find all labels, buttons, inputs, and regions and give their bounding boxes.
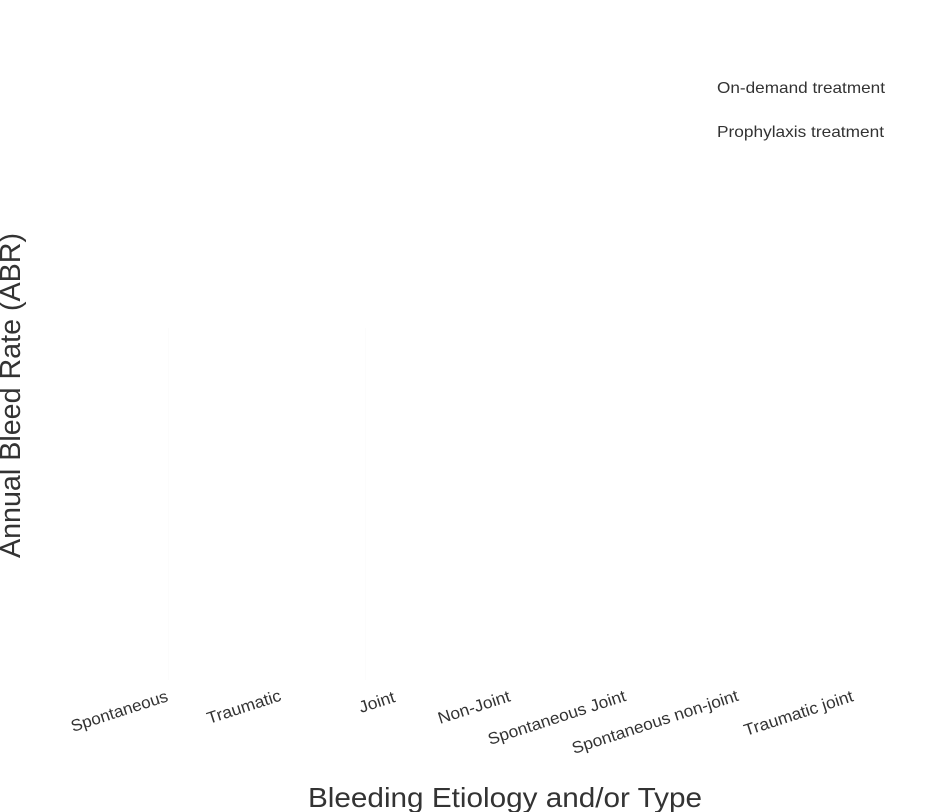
x axis category labels (69, 687, 856, 758)
label: Spontaneous: Spontaneous (69, 687, 170, 736)
label: Traumatic joint: Traumatic joint (742, 687, 856, 740)
legend label: prophylaxis: Prophylaxis treatment (717, 124, 885, 141)
legend (717, 80, 886, 141)
label: Spontaneous Joint: Spontaneous Joint (486, 687, 629, 749)
label: Joint: Joint (357, 688, 398, 717)
label: Traumatic: Traumatic (205, 687, 283, 728)
legend label: on-demand: On-demand treatment (717, 80, 886, 97)
label: Non-Joint: Non-Joint (436, 687, 513, 728)
faint bar traces (168, 328, 366, 680)
label: Spontaneous non-joint: Spontaneous non-joint (570, 687, 741, 758)
